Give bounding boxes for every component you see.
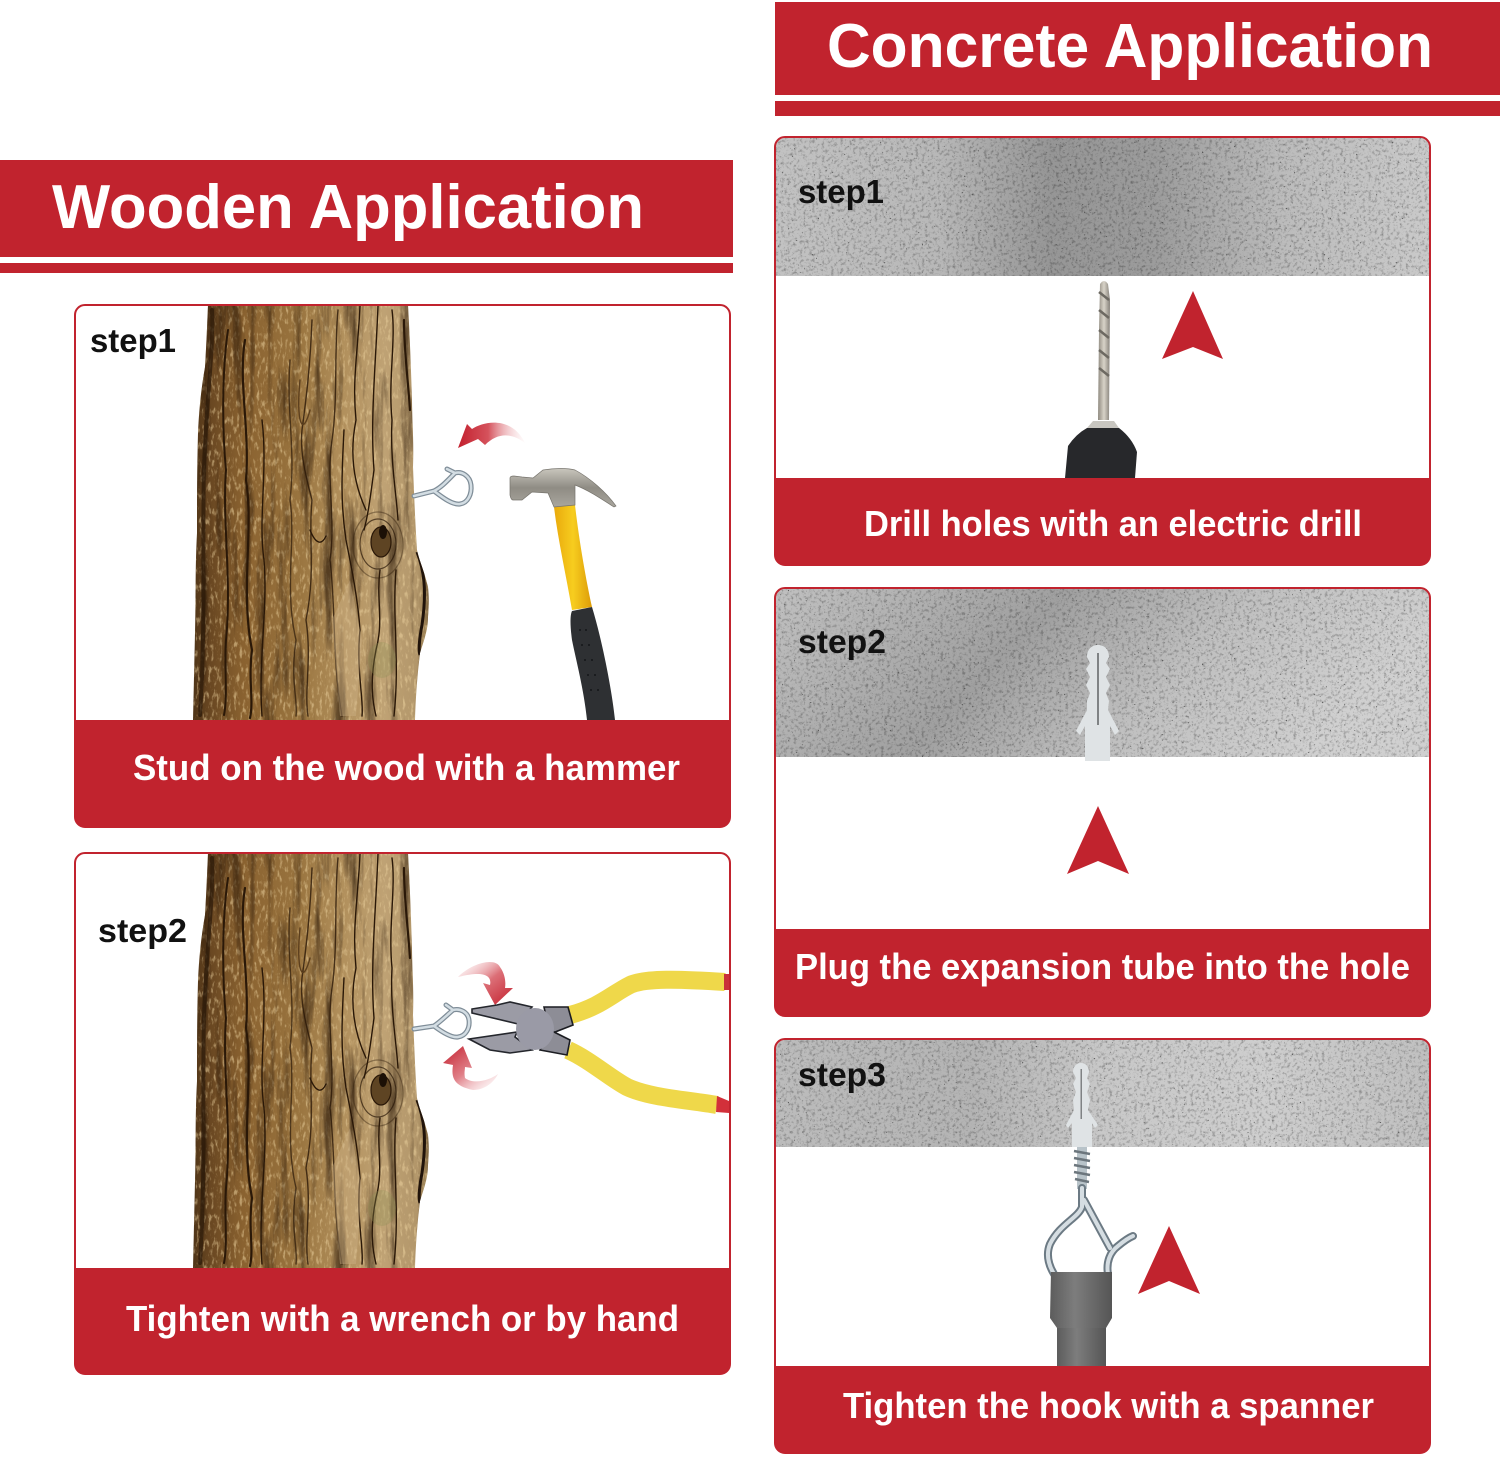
label: step3: step3 [798,1056,886,1093]
heading: Wooden Application [0,160,733,273]
caption: Tighten the hook with a spanner [843,1385,1374,1426]
panel: concrete step 2 [775,588,1430,1016]
heading: Concrete Application: Concrete Application [827,12,1433,81]
footer bar [775,929,1430,1016]
label: step1: step1 [798,173,884,210]
panel: wooden step 1 [75,300,730,827]
concrete slab [776,1040,1429,1147]
label: step1: step1 [90,322,176,359]
icon: eye hook [414,1005,469,1037]
icon: eye hook [414,469,471,504]
footer bar [775,1366,1430,1453]
concrete slab [776,138,1429,276]
tree trunk [190,848,432,1273]
icon: hook with plug and spanner [1048,1063,1133,1366]
label: step2: step2 [98,912,187,949]
icon: expansion plug [1076,645,1119,761]
icon: red up arrow [1138,1226,1200,1294]
panel: concrete step 1 [775,137,1430,565]
concrete slab [776,589,1429,757]
icon: lower curved arrow [443,1046,498,1090]
icon: pliers [469,974,730,1113]
heading: Concrete Application [775,2,1500,116]
footer bar [75,720,730,827]
icon: upper curved arrow [458,962,513,1005]
caption: Drill holes with an electric drill [864,503,1362,544]
icon: red up arrow [1162,291,1223,359]
footer bar [75,1268,730,1374]
caption: Plug the expansion tube into the hole [795,946,1410,987]
panel: concrete step 3 [775,1039,1430,1453]
label: step2: step2 [798,623,886,660]
caption: Tighten with a wrench or by hand [126,1298,679,1339]
icon: hammer [510,468,616,720]
icon: electric drill [1065,281,1137,478]
heading: Wooden Application: Wooden Application [52,173,644,242]
panel: wooden step 2 [75,848,730,1374]
footer bar [775,478,1430,565]
icon: red curved arrow [458,423,525,448]
icon: red up arrow [1067,806,1129,874]
tree trunk [190,300,432,725]
caption: Stud on the wood with a hammer [133,747,680,788]
